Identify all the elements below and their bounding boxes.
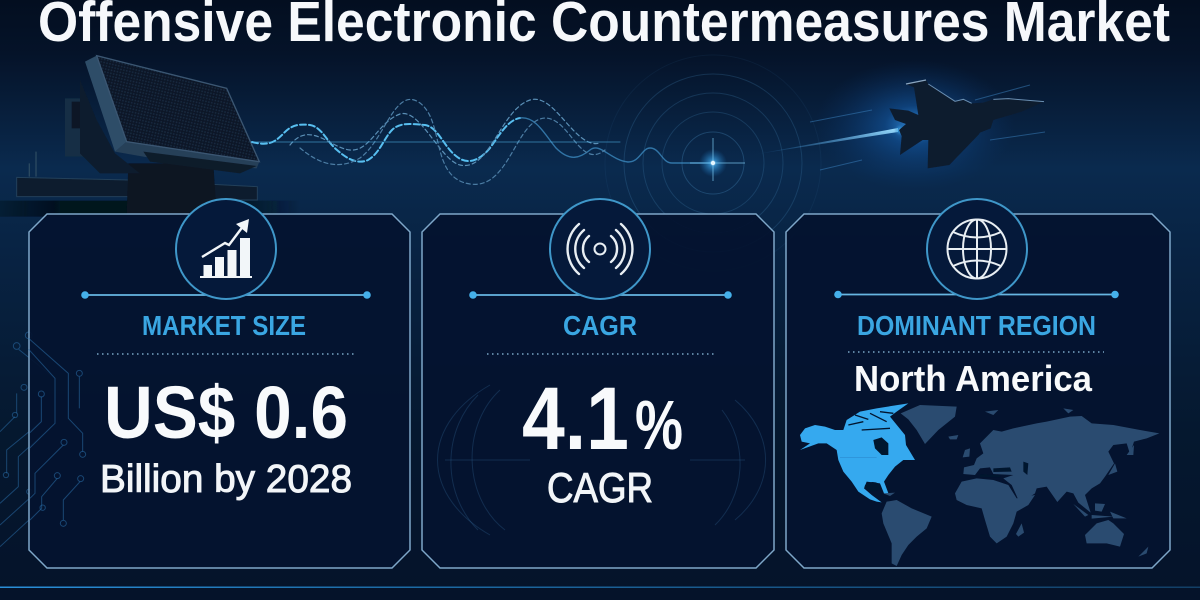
divider line with end dots — [81, 291, 371, 299]
heading: dominant region: DOMINANT REGION — [857, 310, 1096, 341]
arctic channels — [848, 412, 893, 430]
faint radar arcs — [438, 385, 766, 535]
icon: signal broadcast — [550, 199, 650, 299]
value: 4.1%: % — [635, 386, 683, 464]
illustration: signal waves — [252, 99, 712, 184]
panel: CAGR — [422, 199, 774, 568]
value: North America: North America — [854, 358, 1093, 399]
illustration: fighter jet — [889, 80, 1044, 168]
illustration: radar antenna — [0, 56, 300, 217]
north america highlighted — [800, 403, 915, 502]
value: 4.1%: 4.1 — [522, 368, 629, 468]
divider line with end dots — [469, 291, 732, 299]
illustration: jet glow and contrails — [752, 60, 1045, 190]
other continents — [882, 405, 1159, 566]
panel: market size — [29, 199, 410, 568]
value: US$ 0.6: US$ 0.6 — [104, 371, 348, 454]
illustration: circuit traces — [0, 332, 86, 547]
world map — [800, 403, 1159, 566]
bottom accent line — [0, 586, 1200, 588]
value caption: CAGR — [547, 464, 653, 511]
illustration: signal star — [690, 138, 745, 181]
divider line with end dots — [834, 291, 1119, 298]
icon: globe — [927, 199, 1027, 299]
illustration: radar rings — [605, 55, 821, 271]
caribbean islands — [883, 493, 895, 496]
canada us border — [840, 457, 877, 459]
value caption: Billion by 2028 — [100, 458, 352, 501]
panel circuit overlay — [29, 338, 86, 526]
heading: CAGR: CAGR — [563, 310, 637, 341]
inland seas — [980, 462, 1028, 477]
icon: growth chart — [176, 199, 276, 299]
heading: market size: MARKET SIZE — [142, 310, 306, 341]
panel: dominant region — [786, 199, 1170, 568]
